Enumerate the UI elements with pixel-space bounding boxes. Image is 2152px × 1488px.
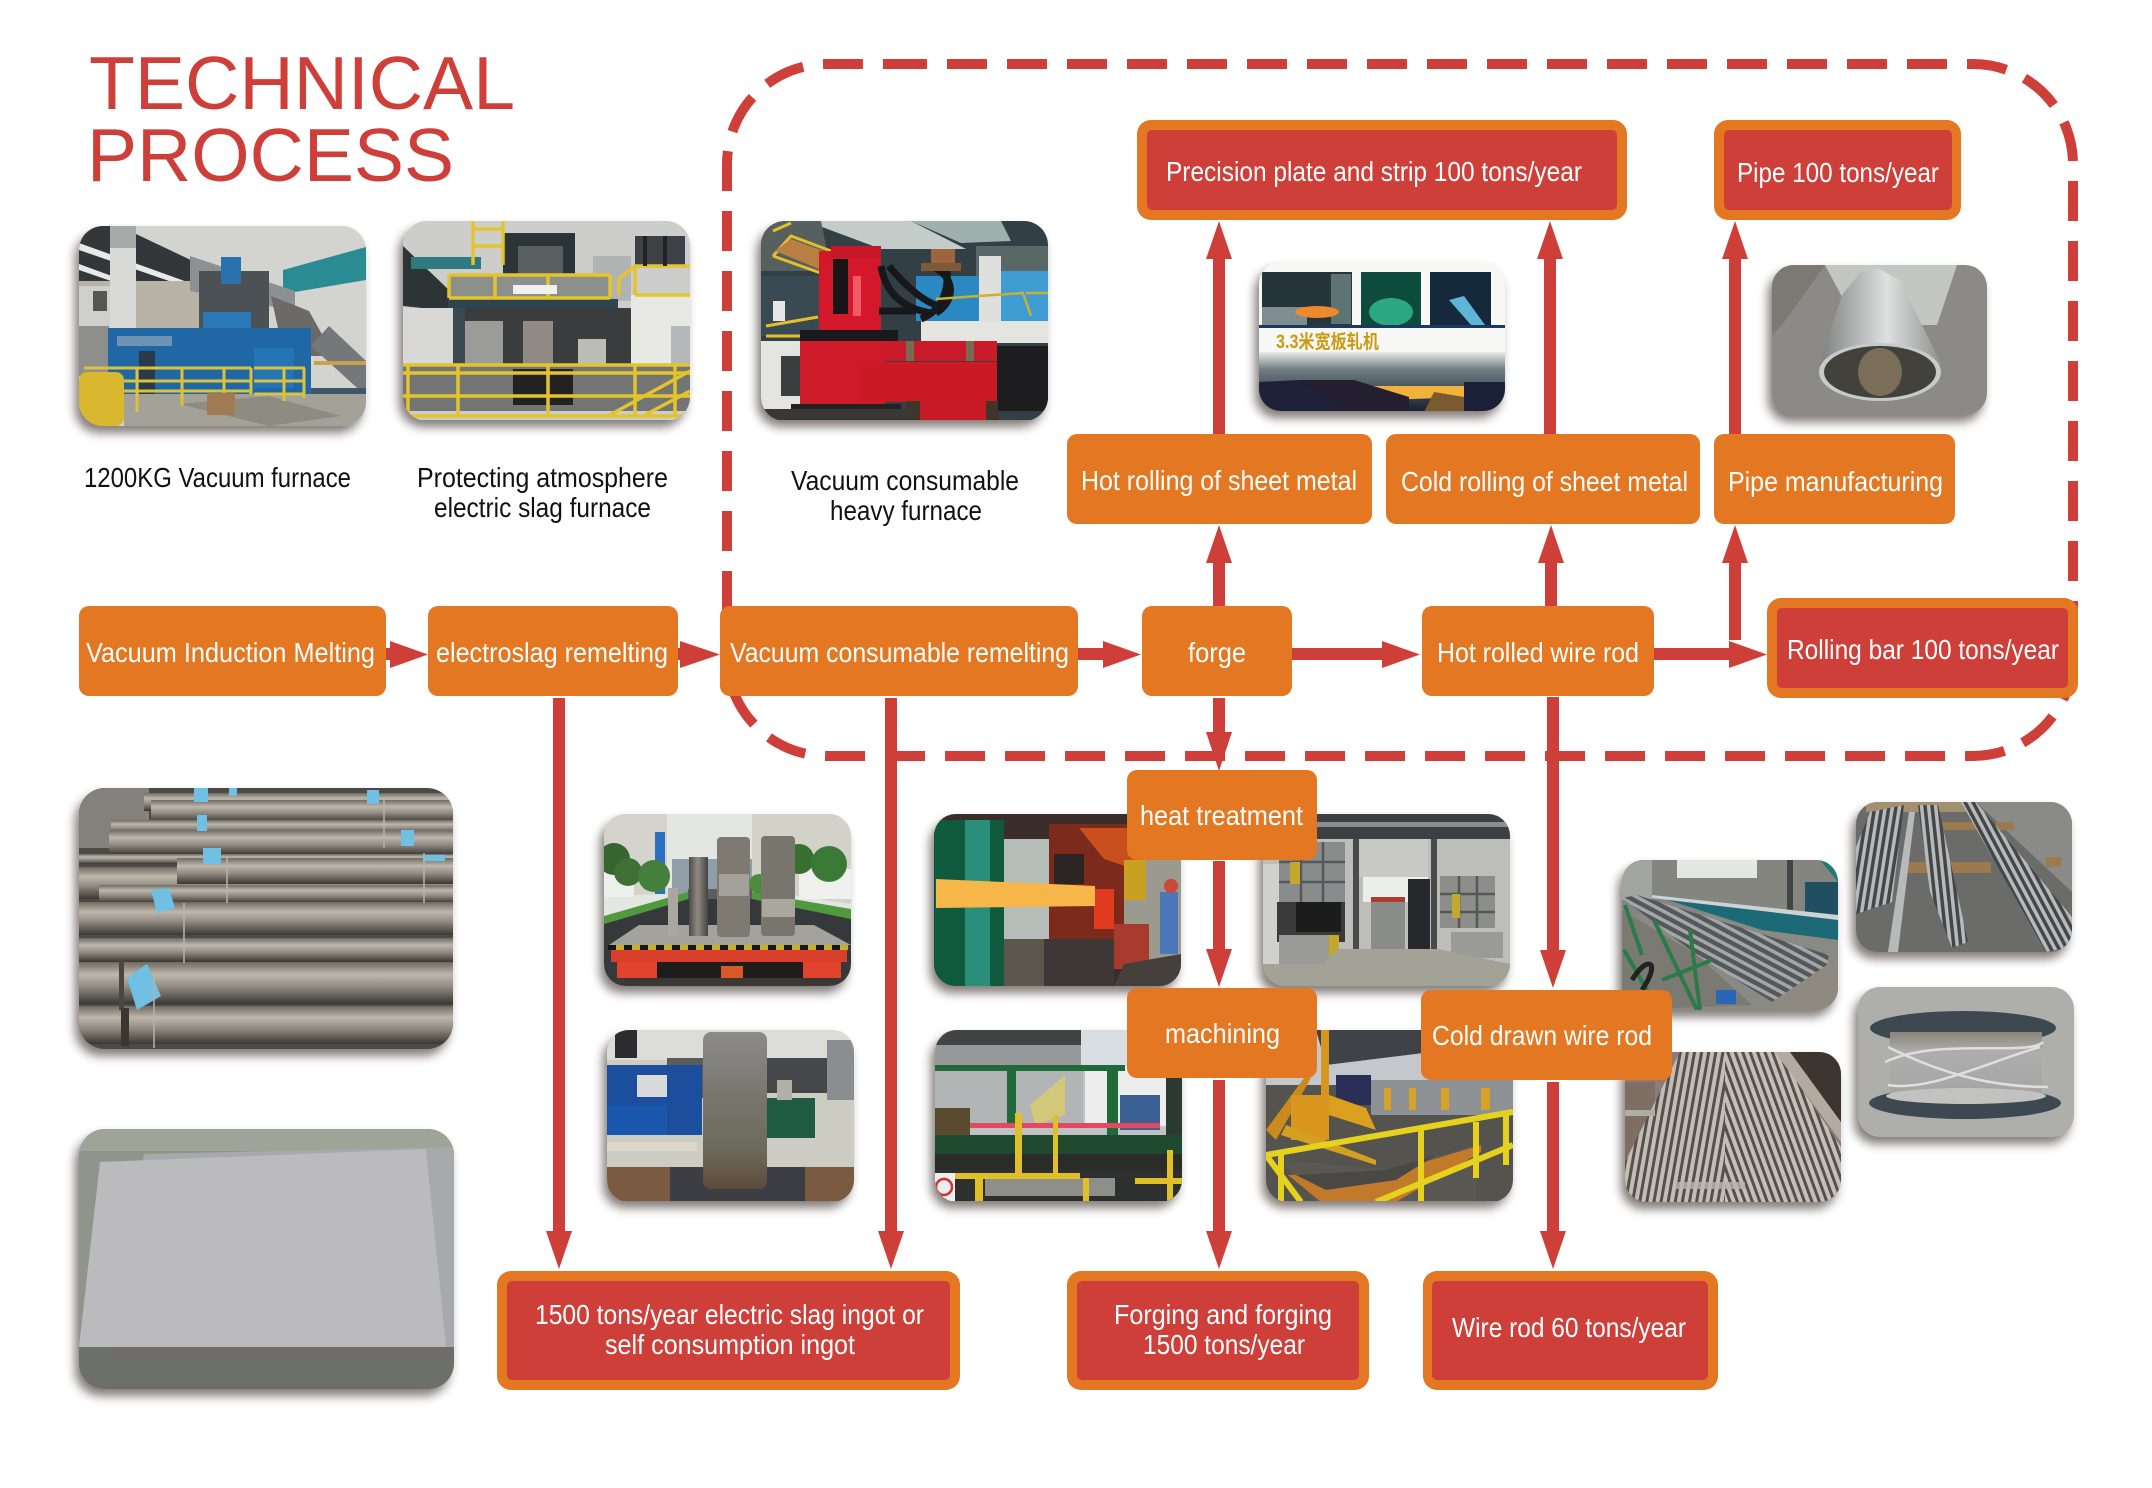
box: cold drawn wire rod: Cold drawn wire rod — [1432, 1020, 1652, 1051]
box: machining: machining — [1165, 1018, 1280, 1049]
title: TECHNICAL — [89, 41, 515, 125]
box: vacuum induction melting: Vacuum Induction Melting — [86, 637, 375, 668]
arrow: consumable to ingot — [878, 698, 904, 1269]
output: precision plate — [1137, 120, 1627, 220]
arrow: electroslag to ingot — [546, 698, 572, 1269]
box: hot rolled wire rod — [1422, 606, 1654, 696]
output: forging: Forging and forging — [1114, 1299, 1332, 1330]
photo: rods on floor — [1852, 802, 2072, 959]
photo: rods on rack — [1618, 860, 1838, 1017]
arrow: heat treatment to machining — [1206, 861, 1232, 987]
arrow: hot rolled to cold drawn — [1540, 697, 1566, 988]
output: precision plate: Precision plate and strip 100 tons/year — [1166, 156, 1582, 187]
output: pipe — [1714, 120, 1961, 220]
arrow: electroslag to consumable — [678, 641, 720, 668]
output: rolling bar — [1767, 598, 2078, 698]
arrow: pipe manufacturing to pipe — [1722, 221, 1748, 434]
photo: rolling mill — [1255, 262, 1505, 418]
photo: heavy furnace — [757, 221, 1048, 427]
arrow: cold rolling to precision plate — [1537, 221, 1563, 434]
arrow: machining to forging — [1206, 1080, 1232, 1269]
box: cold rolling — [1386, 434, 1700, 524]
photo: ingot on floor — [603, 1030, 854, 1208]
box: hot rolling — [1067, 434, 1372, 524]
output: ingot — [497, 1271, 960, 1390]
title: PROCESS — [87, 113, 454, 197]
captions: heavy furnace — [830, 495, 982, 526]
box: vacuum induction melting — [79, 606, 386, 696]
box: heat treatment — [1127, 770, 1317, 860]
photo: vacuum furnace — [75, 226, 366, 433]
box: pipe manufacturing — [1714, 434, 1955, 524]
photo: electric slag furnace — [399, 221, 690, 427]
photo: rolling mill: 3.3米宽板轧机 — [1276, 330, 1379, 353]
box: cold rolling: Cold rolling of sheet metal — [1401, 466, 1688, 497]
box: hot rolling: Hot rolling of sheet metal — [1081, 465, 1357, 496]
output: forging — [1067, 1271, 1369, 1390]
photo: rolling line — [931, 1030, 1182, 1208]
box: hot rolled wire rod: Hot rolled wire rod — [1437, 637, 1639, 668]
arrow: hot rolling to precision plate — [1206, 221, 1232, 434]
output: forging: 1500 tons/year — [1143, 1329, 1305, 1360]
title — [87, 41, 515, 197]
box: forge: forge — [1188, 637, 1246, 668]
arrow: induction to electroslag — [386, 641, 428, 668]
box: vacuum consumable remelting: Vacuum consumable remelting — [730, 637, 1069, 668]
arrow: forge to hot rolled — [1292, 641, 1420, 668]
arrow: consumable to forge — [1078, 641, 1141, 668]
photo: pipe — [1768, 265, 1987, 422]
output: ingot: 1500 tons/year electric slag ingot or — [535, 1299, 924, 1330]
photo: heat treatment furnace — [1259, 814, 1510, 993]
box: vacuum consumable remelting — [720, 606, 1078, 696]
box: electroslag remelting: electroslag remelting — [436, 637, 668, 668]
output: ingot: self consumption ingot — [605, 1329, 855, 1360]
box: pipe manufacturing: Pipe manufacturing — [1728, 466, 1943, 497]
arrow: forge to heat treatment — [1206, 698, 1232, 771]
dashed boundary — [727, 64, 2073, 756]
output: rolling bar: Rolling bar 100 tons/year — [1787, 634, 2059, 665]
arrow: cold drawn to wire rod — [1540, 1082, 1566, 1269]
photo: stacked bars — [75, 788, 453, 1056]
photo: machining workshop — [1262, 1030, 1513, 1208]
box: machining — [1127, 988, 1317, 1078]
box: electroslag remelting — [428, 606, 678, 696]
captions — [84, 462, 1019, 526]
captions: Vacuum consumable — [791, 465, 1019, 496]
box: cold drawn wire rod — [1421, 990, 1672, 1080]
arrow: forge to hot rolling — [1206, 525, 1232, 606]
photo: ingots on cart — [598, 814, 851, 993]
arrow: hot rolled to rolling bar — [1654, 641, 1767, 668]
arrow: rolling line to pipe manufacturing — [1722, 525, 1748, 640]
captions: electric slag furnace — [434, 492, 651, 523]
arrow: hot rolled to cold rolling — [1538, 525, 1564, 606]
output: wire rod — [1423, 1271, 1718, 1390]
box: forge — [1142, 606, 1292, 696]
photo: wire spool — [1854, 987, 2074, 1144]
photo: rods straight — [1621, 1052, 1841, 1209]
output: wire rod: Wire rod 60 tons/year — [1452, 1312, 1686, 1343]
photo: forging — [930, 814, 1181, 993]
captions: Protecting atmosphere — [417, 462, 668, 493]
output: pipe: Pipe 100 tons/year — [1737, 157, 1939, 188]
photo: plate — [75, 1129, 454, 1396]
box: heat treatment: heat treatment — [1140, 800, 1303, 831]
captions: 1200KG Vacuum furnace — [84, 462, 351, 493]
